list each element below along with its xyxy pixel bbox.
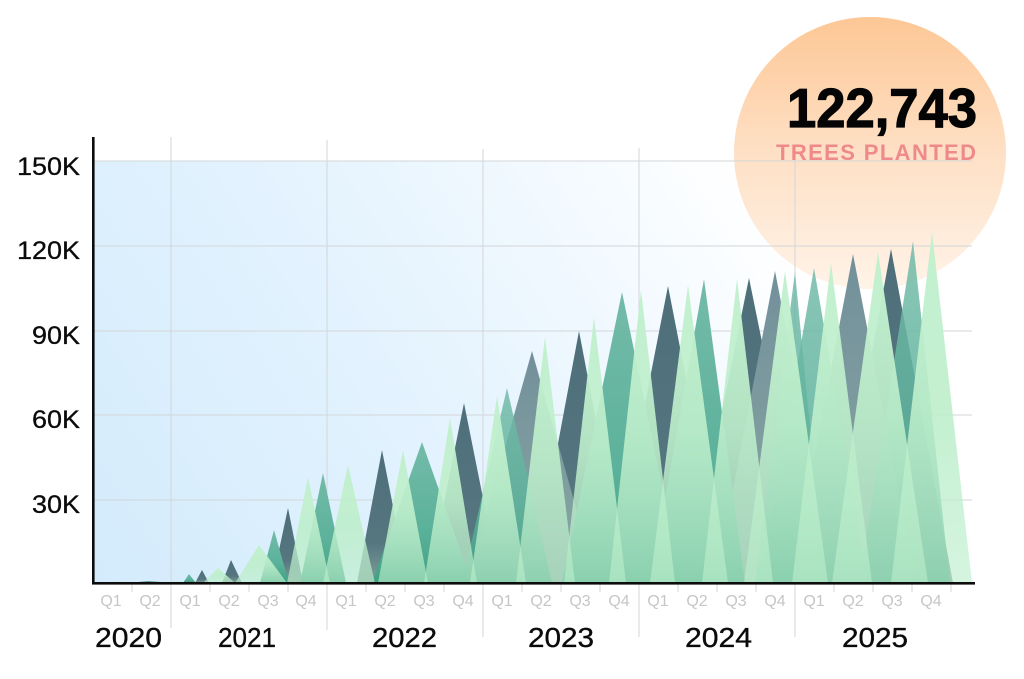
y axis labels: 150K bbox=[17, 153, 80, 181]
quarter labels: Q2 bbox=[218, 593, 240, 610]
year labels: 2021 bbox=[218, 622, 276, 653]
x axis line bbox=[92, 582, 975, 585]
quarter labels: Q4 bbox=[764, 593, 786, 610]
quarter labels: Q4 bbox=[452, 593, 474, 610]
year labels bbox=[95, 622, 908, 653]
quarter labels: Q1 bbox=[335, 593, 357, 610]
grid lines bbox=[93, 137, 972, 637]
quarter labels: Q3 bbox=[413, 593, 435, 610]
quarter labels: Q4 bbox=[608, 593, 630, 610]
year labels: 2022 bbox=[372, 622, 437, 653]
y axis line bbox=[92, 137, 95, 584]
callout: total trees planted bbox=[776, 77, 977, 165]
quarter labels: Q2 bbox=[686, 593, 708, 610]
series: dark peaks bbox=[128, 249, 953, 583]
year labels: 2024 bbox=[685, 622, 752, 653]
y axis labels: 120K bbox=[17, 237, 80, 265]
year labels: 2020 bbox=[95, 622, 162, 653]
year labels: 2025 bbox=[842, 622, 908, 653]
quarter labels: Q2 bbox=[139, 593, 161, 610]
quarter labels: Q4 bbox=[920, 593, 942, 610]
quarter labels: Q2 bbox=[842, 593, 864, 610]
area chart: overlapping triangular peaks bbox=[100, 232, 972, 583]
y axis labels: 60K bbox=[32, 406, 80, 434]
quarter labels: Q1 bbox=[100, 593, 122, 610]
quarter labels: Q3 bbox=[569, 593, 591, 610]
y axis labels: 90K bbox=[32, 322, 80, 350]
quarter labels: Q3 bbox=[257, 593, 279, 610]
quarter labels: Q1 bbox=[647, 593, 669, 610]
callout circle background bbox=[734, 17, 1006, 289]
y axis labels: 30K bbox=[32, 491, 80, 519]
quarter labels: Q1 bbox=[179, 593, 201, 610]
y axis labels bbox=[17, 153, 80, 519]
series: light green peaks bbox=[100, 232, 972, 583]
quarter labels: Q2 bbox=[530, 593, 552, 610]
plot background gradient bbox=[93, 161, 973, 583]
quarter labels: Q2 bbox=[374, 593, 396, 610]
quarter labels: Q4 bbox=[295, 593, 317, 610]
series: gray peaks bbox=[467, 254, 916, 583]
callout number: 122,743 bbox=[787, 77, 977, 139]
year labels: 2023 bbox=[528, 622, 594, 653]
quarter labels: Q3 bbox=[725, 593, 747, 610]
series: teal peaks bbox=[183, 241, 950, 583]
quarter labels: Q1 bbox=[491, 593, 513, 610]
quarter labels: Q3 bbox=[881, 593, 903, 610]
quarter labels: Q1 bbox=[803, 593, 825, 610]
callout caption: TREES PLANTED bbox=[776, 140, 976, 165]
quarter labels bbox=[100, 593, 942, 610]
